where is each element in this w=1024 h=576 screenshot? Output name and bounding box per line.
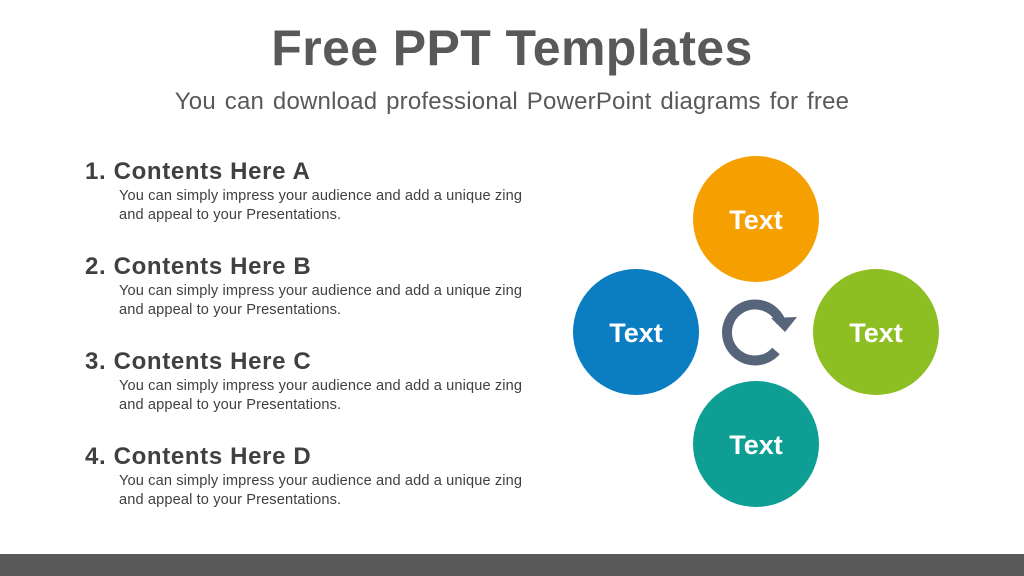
circle: blue left	[573, 269, 699, 395]
item 3: and appeal to your Presentations.	[119, 397, 341, 413]
item 3: You can simply impress your audience and add a unique zing	[119, 378, 522, 394]
circle: orange top: Text	[729, 205, 783, 235]
circle: blue left: Text	[609, 318, 663, 348]
circle: green right: Text	[849, 318, 903, 348]
item 4: and appeal to your Presentations.	[119, 492, 341, 508]
item 1: 1. Contents Here A	[85, 158, 311, 185]
item 1: You can simply impress your audience and add a unique zing	[119, 188, 522, 204]
item 1	[85, 158, 522, 223]
item 4	[85, 443, 522, 508]
item 2: You can simply impress your audience and add a unique zing	[119, 283, 522, 299]
item 2: and appeal to your Presentations.	[119, 302, 341, 318]
title: Free PPT Templates	[271, 20, 753, 76]
item 4: You can simply impress your audience and add a unique zing	[119, 473, 522, 489]
icon: cycle arrow	[727, 304, 797, 360]
circle: orange top	[693, 156, 819, 282]
circle: teal bottom: Text	[729, 430, 783, 460]
item 2: 2. Contents Here B	[85, 253, 311, 280]
subtitle: You can download professional PowerPoint diagrams for free	[175, 88, 849, 115]
item 3	[85, 348, 522, 413]
item 4: 4. Contents Here D	[85, 443, 311, 470]
circle: teal bottom	[693, 381, 819, 507]
footer bar	[0, 554, 1024, 576]
item 3: 3. Contents Here C	[85, 348, 311, 375]
circle: green right	[813, 269, 939, 395]
item 2	[85, 253, 522, 318]
item 1: and appeal to your Presentations.	[119, 207, 341, 223]
